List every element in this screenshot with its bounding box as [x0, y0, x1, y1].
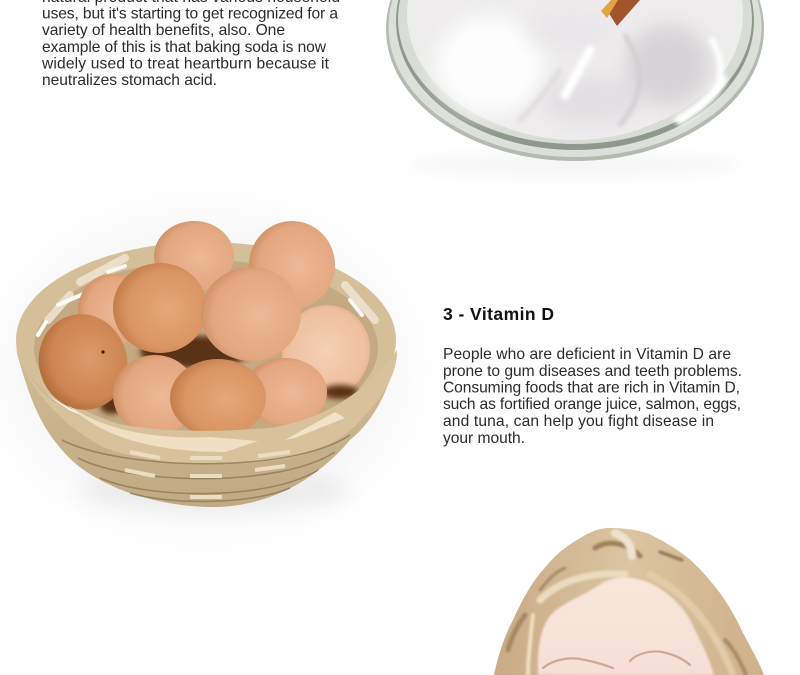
egg: back top: [154, 221, 234, 291]
text block: Vitamin D description: Consuming foods that are rich in Vitamin D,: [443, 380, 740, 396]
text block: baking soda description: example of this is that baking soda is now: [42, 39, 327, 56]
hair: [494, 528, 764, 675]
egg: center: [201, 267, 301, 361]
baking soda powder: [415, 0, 735, 140]
image: girl's forehead and hair: [494, 528, 764, 675]
basket back rim: [16, 242, 396, 438]
text block: baking soda description: uses, but it's starting to get recognized for a: [42, 6, 338, 22]
text block: Vitamin D description: such as fortified orange juice, salmon, eggs,: [443, 396, 741, 413]
egg: bottom center: [170, 359, 266, 437]
text block: baking soda description: [41, 0, 340, 89]
text block: Vitamin D description: and tuna, can help you fight disease in: [443, 413, 714, 430]
dark gaps: [100, 336, 358, 414]
egg: upper left: [113, 263, 207, 353]
basket body: [16, 350, 397, 507]
face: [538, 577, 714, 675]
basket front rim and weave: [15, 345, 397, 501]
egg: back left: [78, 274, 146, 346]
egg: left speckled: [28, 304, 138, 420]
text block: Vitamin D description: prone to gum diseases and teeth problems.: [443, 363, 742, 380]
egg: right pale: [272, 295, 380, 407]
wooden spoon: [601, 0, 640, 26]
egg: back right: [249, 221, 335, 309]
text block: baking soda description: widely used to treat heartburn because it: [41, 56, 330, 72]
egg: bottom right: [243, 358, 327, 426]
text block: Vitamin D description: People who are deficient in Vitamin D are: [443, 346, 731, 363]
text block: baking soda description: neutralizes stomach acid.: [42, 72, 217, 89]
heading: 3 - Vitamin D: 3 - Vitamin D: [443, 304, 554, 324]
egg: bottom left: [113, 355, 197, 435]
text block: Vitamin D description: your mouth.: [443, 430, 525, 447]
text block: Vitamin D description: [443, 346, 742, 447]
bowl glass: [386, 0, 764, 161]
image: glass bowl of baking soda: [386, 0, 764, 177]
eyebrows: [543, 651, 690, 668]
image: basket of eggs: [0, 210, 410, 530]
text block: baking soda description: variety of health benefits, also. One: [42, 22, 285, 39]
